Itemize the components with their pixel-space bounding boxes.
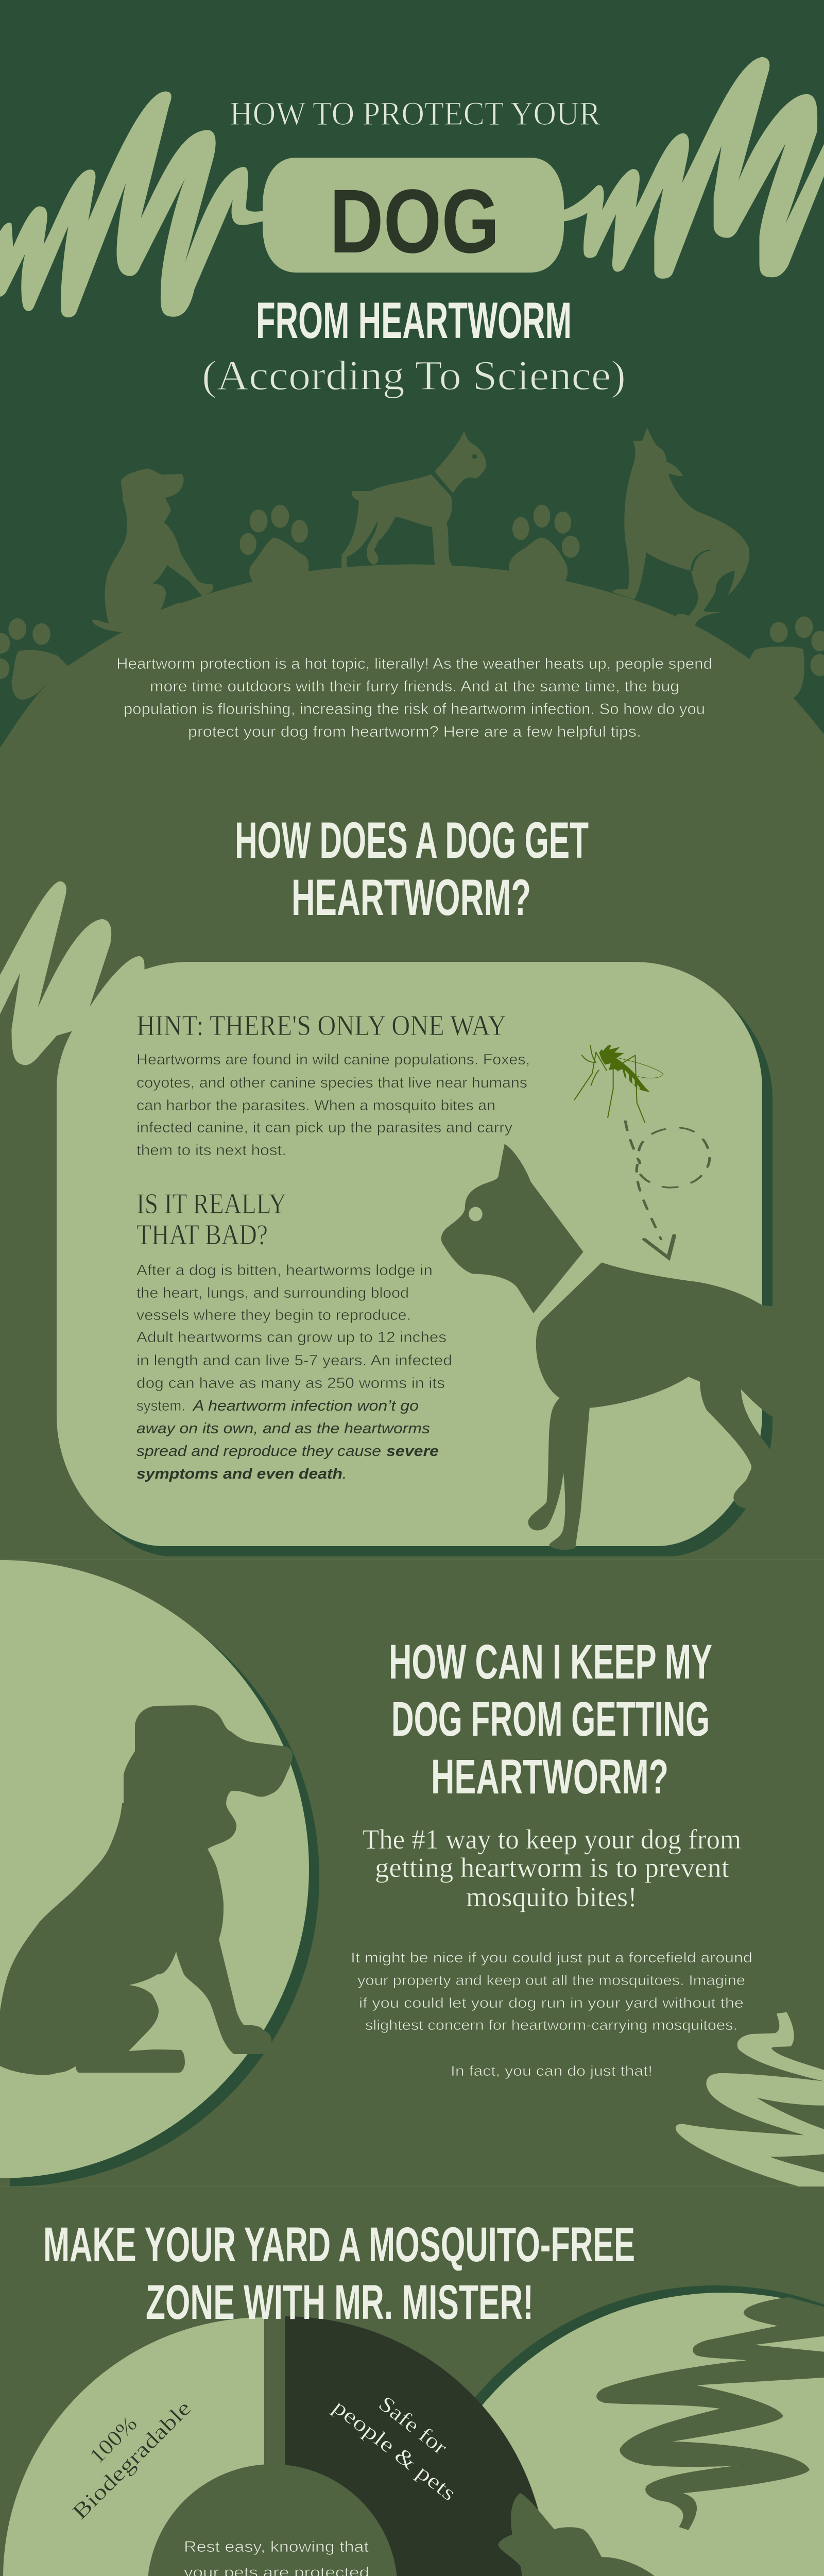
text: hint: them to its next host.	[136, 1142, 286, 1159]
pie segment: safe for people and pets: Safe for	[374, 2392, 452, 2460]
text: hint: Heartworms are found in wild canine populations. Foxes,	[136, 1052, 530, 1068]
text: hint: coyotes, and other canine species that live near humans	[136, 1075, 527, 1091]
text: is it really that bad: system.	[136, 1398, 185, 1414]
heading: how can i keep my dog	[389, 1635, 712, 1804]
pie segment: safe for people and pets	[285, 2316, 547, 2576]
text: is it really that bad: .	[342, 1466, 347, 1482]
subheading: the #1 way: mosquito bites!	[466, 1882, 637, 1912]
icon: mosquito	[574, 1045, 663, 1123]
title box: dog: DOG	[330, 171, 500, 272]
header: title and squiggles	[0, 57, 824, 399]
intro paragraph: protect your dog from heartworm? Here are a few helpful tips.	[188, 723, 641, 740]
pie segment: safe for people and pets: people & pets	[328, 2395, 460, 2506]
pie centre text: Rest easy, knowing that	[184, 2538, 369, 2555]
paw: centre left	[239, 505, 308, 585]
squiggle: bottom right	[676, 2012, 824, 2187]
panel shadow	[67, 972, 772, 1556]
panel background	[57, 962, 762, 1546]
circle	[0, 1560, 309, 2178]
dog: howling	[612, 428, 749, 626]
intro paragraph: Heartworm protection is a hot topic, literally! As the weather heats up, people spend	[116, 655, 712, 672]
pie centre text	[184, 2538, 369, 2576]
hill with dogs and paws	[0, 428, 824, 773]
text: is it really that bad: vessels where they begin to reproduce.	[136, 1307, 411, 1324]
pie segment: biodegradable: Biodegradable	[68, 2396, 196, 2524]
dashed flight path with arrow	[625, 1121, 710, 1258]
text: is it really that bad: dog can have as many as 250 worms in its	[136, 1375, 445, 1392]
text: is it really that bad: IS IT REALLY	[136, 1188, 286, 1220]
pie segment: biodegradable	[3, 2317, 264, 2576]
heading: how can i keep my dog: HEARTWORM?	[431, 1750, 668, 1804]
body text: forcefield	[351, 1950, 752, 2079]
dog: standing	[341, 431, 486, 571]
pie segment: biodegradable: 100%	[85, 2412, 142, 2468]
text: hint: infected canine, it can pick up the parasites and carry	[136, 1120, 513, 1136]
dog: sitting	[92, 468, 213, 642]
body text: forcefield: slightest concern for heartworm-carrying mosquitoes.	[365, 2017, 737, 2033]
intro paragraph: more time outdoors with their furry friends. And at the same time, the bug	[150, 678, 679, 695]
squiggle inside circle	[596, 2297, 824, 2530]
body text: forcefield: In fact, you can do just that!	[451, 2063, 653, 2079]
text: is it really that bad: symptoms and even death	[136, 1466, 342, 1482]
hill	[0, 565, 824, 773]
dog silhouette: howling	[498, 2493, 824, 2576]
squiggle: left	[0, 92, 263, 317]
body text: forcefield: your property and keep out all the mosquitoes. Imagine	[357, 1972, 745, 1988]
text: is it really that bad: the heart, lungs, and surrounding blood	[136, 1285, 409, 1301]
pie chart: features	[2, 2316, 547, 2576]
text: hint: HINT: THERE'S ONLY ONE WAY	[136, 1010, 506, 1042]
text: is it really that bad: THAT BAD?	[136, 1219, 268, 1251]
title line: from heartworm: FROM HEARTWORM	[256, 292, 572, 349]
title box: dog	[263, 158, 564, 273]
heading: make your yard: ZONE WITH MR. MISTER!	[146, 2275, 534, 2330]
text: is it really that bad: in length and can live 5-7 years. An infected	[136, 1352, 452, 1369]
paw: far left	[0, 618, 68, 700]
heading: how does a dog get heartworm: HOW DOES A DOG GET	[235, 811, 589, 869]
text: is it really that bad: A heartworm infection won’t go	[192, 1398, 419, 1414]
intro paragraph: population is flourishing, increasing the risk of heartworm infection. So how do you	[124, 701, 705, 718]
title line: how to protect your: HOW TO PROTECT YOUR	[230, 95, 601, 132]
paw: centre right	[509, 504, 580, 582]
heading: how does a dog get heartworm: HEARTWORM?	[291, 869, 531, 926]
text: is it really that bad: Adult heartworms can grow up to 12 inches	[136, 1329, 447, 1346]
subheading: the #1 way	[363, 1824, 741, 1912]
text: hint	[136, 1010, 530, 1159]
subheading: the #1 way: getting heartworm is to prevent	[375, 1852, 729, 1883]
text: is it really that bad: After a dog is bitten, heartworms lodge in	[136, 1262, 433, 1279]
circle shadow	[10, 1632, 319, 2187]
heading: make your yard	[43, 2217, 635, 2330]
subheading: the #1 way: The #1 way to keep your dog from	[363, 1824, 741, 1855]
subtitle: according to science: (According To Science)	[202, 352, 626, 399]
text: is it really that bad: away on its own, and as the heartworms	[136, 1420, 430, 1437]
squiggle: panel corner	[0, 881, 145, 1065]
text: is it really that bad: spread and reproduce they cause	[136, 1443, 381, 1460]
text: is it really that bad: severe	[386, 1443, 439, 1460]
squiggle: right	[564, 57, 824, 279]
body text: forcefield: if you could let your dog run in your yard without the	[359, 1995, 744, 2011]
panel: keep dog from heartworm	[0, 1560, 824, 2187]
paw: far right	[749, 616, 824, 699]
heading: how does a dog get heartworm	[235, 811, 589, 926]
body text: forcefield: It might be nice if you could just put a forcefield around	[351, 1950, 752, 1965]
big circle	[408, 2293, 824, 2576]
text: hint: can harbor the parasites. When a mosquito bites an	[136, 1097, 495, 1114]
panel: heartworm explanation	[57, 962, 788, 1556]
pie centre circle	[147, 2464, 398, 2576]
text: is it really that bad	[136, 1188, 452, 1482]
dog silhouette: sitting profile	[0, 1705, 293, 2075]
big circle shadow	[401, 2285, 824, 2576]
dog silhouette with collar	[441, 1144, 788, 1550]
intro paragraph	[116, 655, 712, 740]
panel: mosquito free zone	[2, 2217, 824, 2576]
